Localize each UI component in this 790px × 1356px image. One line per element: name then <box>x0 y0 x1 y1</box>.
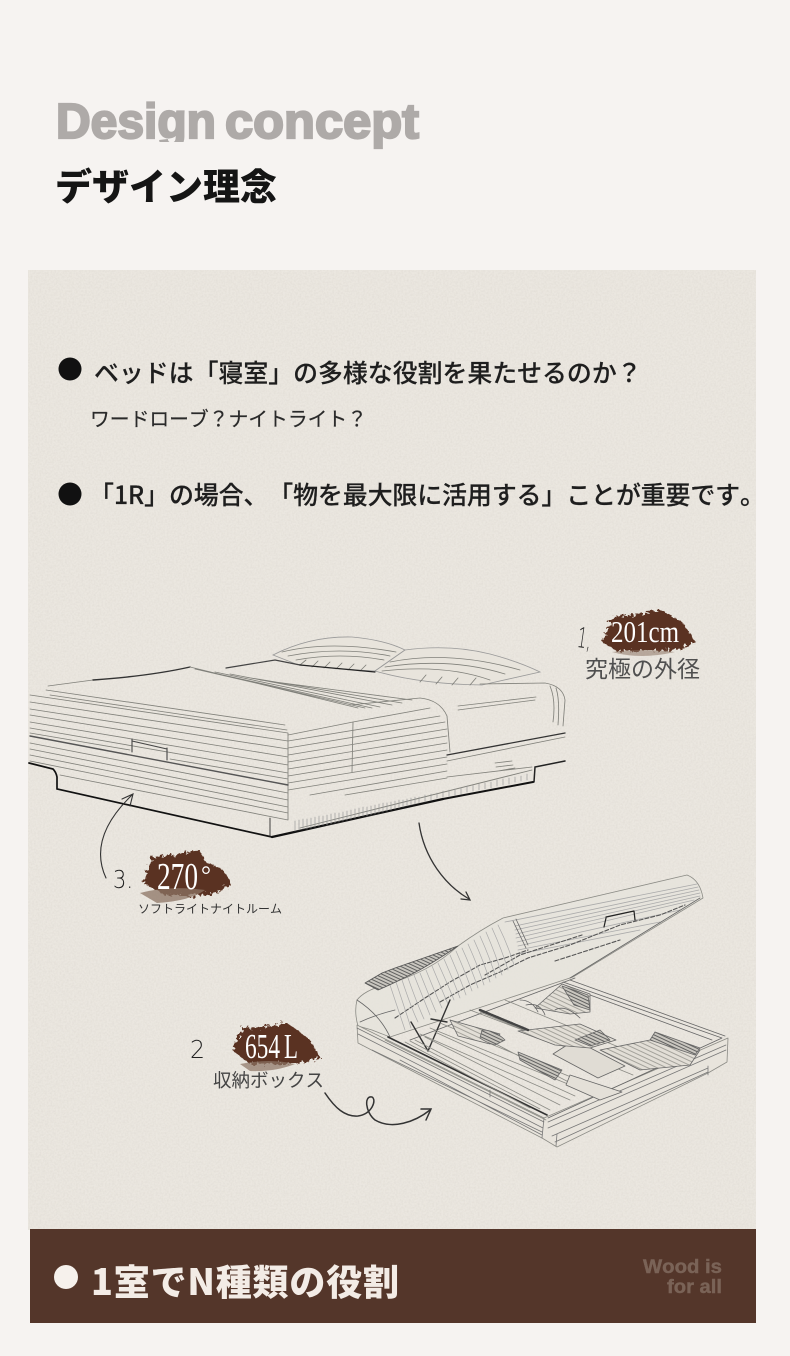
bullet question 1: ベッドは「寝室」の多様な役割を果たせるのか？ <box>94 354 642 390</box>
banner small tagline: for all <box>667 1277 722 1298</box>
callout: 201cm: 1, <box>575 621 594 656</box>
callout: 270 degrees: ° <box>201 862 211 889</box>
callout: 654 L <box>190 1023 324 1093</box>
heading: Japanese title: デザイン理念 <box>55 157 277 211</box>
callout: 201cm: 究極の外径 <box>585 650 700 684</box>
bed duvet top <box>46 667 450 752</box>
folded clothes in storage <box>450 984 700 1100</box>
compartment floor slats <box>405 1000 655 1110</box>
banner: brown footer <box>30 1229 756 1323</box>
lid struts <box>411 1000 450 1051</box>
callout: 201cm <box>575 610 700 684</box>
arrow: to drawer <box>101 794 133 878</box>
banner title: 1室でN種類の役割 <box>91 1254 399 1306</box>
heading: Design concept: Design <box>56 95 216 149</box>
panel: beige paper <box>28 270 756 1230</box>
callout: 270 degrees: ソフトライトナイトルーム <box>138 900 282 917</box>
bed base hatching <box>295 774 527 831</box>
heading: Design concept: concept <box>225 95 419 149</box>
illustration: open storage bed <box>356 875 728 1147</box>
callout: 654 L: 収納ボックス <box>213 1067 324 1093</box>
open bed lid <box>356 875 703 1040</box>
bed right face stripes <box>288 708 447 795</box>
callout: 654 L: 654 <box>245 1027 280 1066</box>
arrow: looped to storage <box>325 1093 431 1125</box>
banner small tagline <box>643 1257 722 1298</box>
callout: 654 L: L <box>284 1027 298 1066</box>
bullet statement 2: 「1R」の場合、「物を最大限に活用する」ことが重要です。 <box>89 476 765 512</box>
callout: 270 degrees: 270 <box>157 856 198 898</box>
folded pillow on lid <box>365 946 458 990</box>
open bed frame <box>357 980 728 1147</box>
callout: 270 degrees <box>113 850 282 917</box>
banner small tagline: Wood is <box>643 1257 722 1278</box>
callout: 201cm: 201cm <box>611 614 679 649</box>
bed thick edges <box>29 736 443 837</box>
callout: 270 degrees: 3. <box>113 865 133 894</box>
bed mattress and base <box>226 660 565 828</box>
callout: 654 L: 2 <box>190 1035 205 1064</box>
banner bullet <box>54 1265 78 1289</box>
bed pillows <box>273 637 540 685</box>
arrow: closed to open bed <box>419 823 470 900</box>
illustration: closed bed <box>29 637 565 837</box>
heading: Design concept <box>58 101 420 150</box>
bed left face stripes <box>30 695 288 820</box>
sub question text: ワードローブ？ナイトライト？ <box>90 403 367 432</box>
